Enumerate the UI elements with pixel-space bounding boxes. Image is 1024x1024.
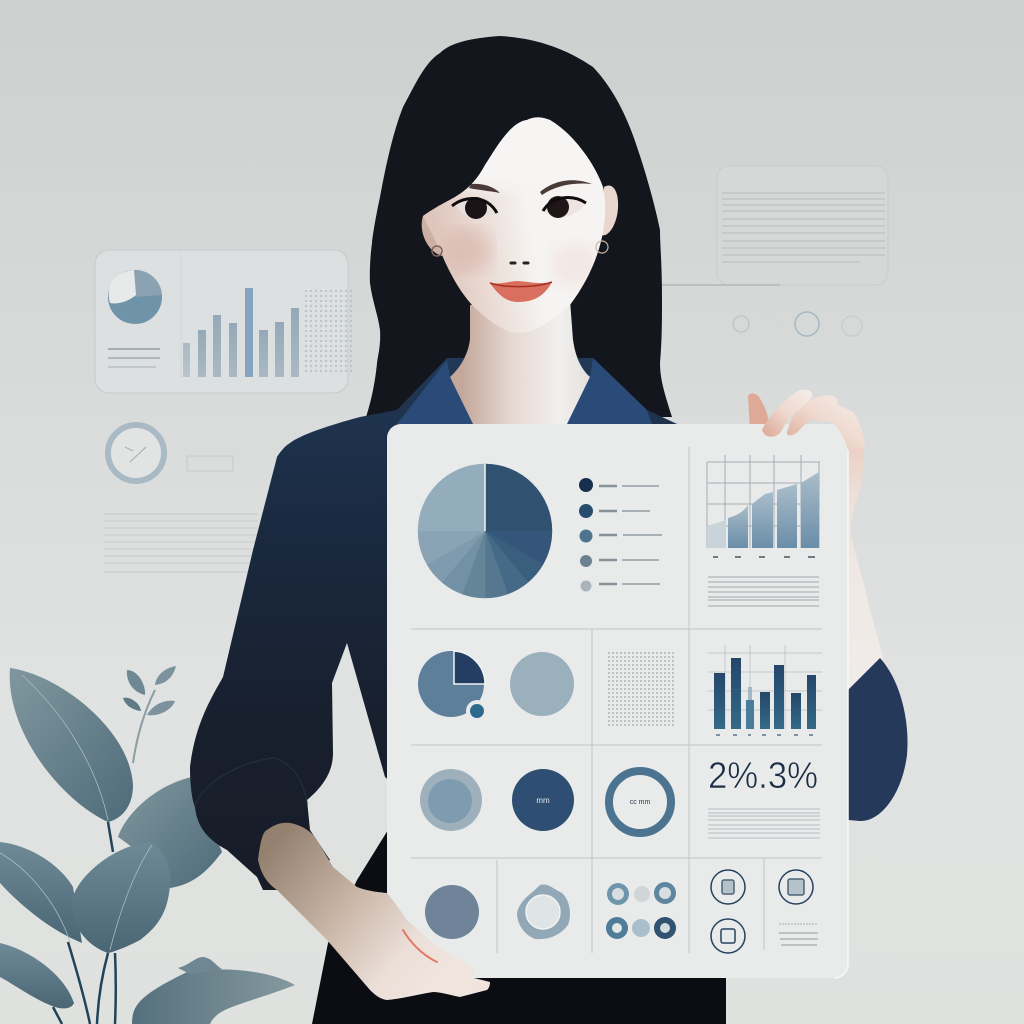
face [422,110,618,333]
leaf right behind sleeve [118,777,222,888]
hair [366,36,672,417]
neck overlay above collar [450,340,590,426]
bottom row icons [425,870,818,953]
figure: torso and sleeve [190,358,690,890]
leaf lower left [0,943,74,1008]
leaf bottom [132,969,295,1024]
row three circles: cc mm [630,799,650,806]
icon: faint clock [108,425,164,481]
eyes [455,199,497,218]
ears [422,205,442,256]
lips [490,281,552,302]
row three circles [420,769,671,833]
chart: area bars [707,455,820,606]
legend [579,478,662,592]
statistic: 2%.3% [708,755,818,796]
panel: right faint notes [656,166,888,336]
row three circles: mm [536,796,550,805]
leaf center [72,842,170,953]
right sleeve cuff [848,658,908,821]
right thumb [748,393,770,430]
left forearm and hand [258,823,490,1000]
earrings [432,246,442,256]
twig leaves [127,670,145,695]
leaf far left [0,842,82,943]
faint label box [187,456,233,471]
plant stems [53,822,116,1024]
chart: large pie [418,464,552,598]
plant [0,666,295,1024]
chart: bar chart [708,645,822,735]
brows [469,184,500,193]
nose [511,262,528,264]
sleeve cuff fold [195,758,307,805]
dress skirt [312,830,726,1024]
right hand fingers on board [762,389,865,450]
text block: faint left lines [104,514,258,572]
chart: small pie [418,651,488,722]
collar [397,358,652,424]
chart: solid circle [510,652,574,716]
statistic [708,755,820,838]
panel: main board [387,424,848,978]
chart: dot matrix [607,650,674,726]
leaf top left [10,668,133,822]
panel: left faint dashboard [95,250,352,393]
right forearm [840,411,883,690]
figure: neck [450,300,590,426]
